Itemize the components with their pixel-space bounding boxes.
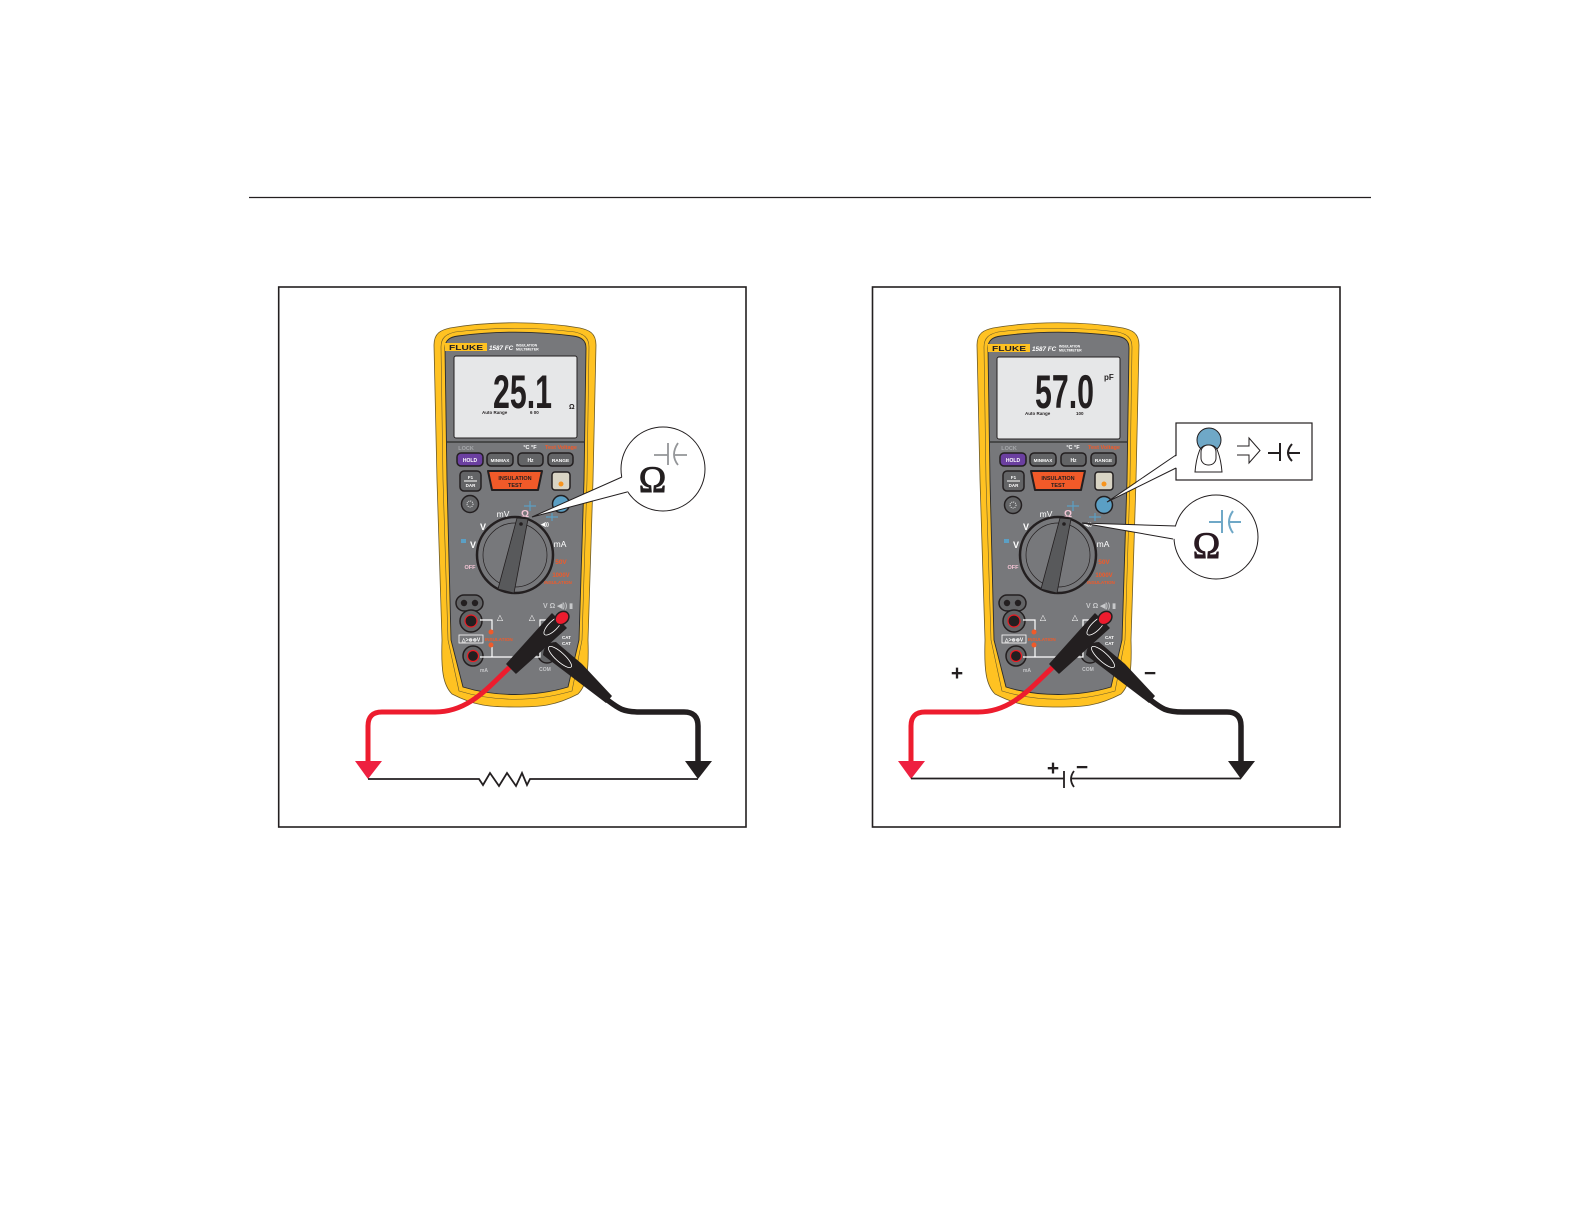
- display: Auto Range: [1025, 411, 1051, 416]
- jack markings: [459, 603, 573, 674]
- display: 25.1: [493, 365, 552, 418]
- button row 1: HOLD: [1006, 458, 1020, 464]
- function labels: LOCK: [1001, 446, 1017, 452]
- meter body: [977, 323, 1139, 707]
- dial labels: V: [1013, 540, 1019, 550]
- polarity labels: −: [1076, 756, 1088, 779]
- meter body: [434, 323, 596, 707]
- jack markings: △: [529, 613, 536, 622]
- display: [454, 356, 577, 438]
- button row 2: DAR: [1009, 483, 1019, 488]
- dial labels: mV: [1040, 509, 1053, 519]
- button row 2: TEST: [508, 483, 523, 489]
- function labels: LOCK: [458, 446, 474, 452]
- callout: dial position left: Ω: [639, 460, 666, 501]
- dial labels: INSULATION: [544, 580, 573, 585]
- meter faceplate: [445, 332, 586, 694]
- function labels: Test Voltage: [1088, 445, 1120, 451]
- dial labels: ◀)): [1083, 521, 1092, 528]
- dial labels: 1000V: [1095, 573, 1113, 579]
- display: Auto Range: [482, 410, 508, 415]
- button row 1: [457, 453, 573, 466]
- button row 1: RANGE: [552, 458, 570, 464]
- button row 1: RANGE: [1095, 458, 1113, 464]
- dial labels: mA: [1097, 539, 1110, 549]
- display: 6 00: [530, 410, 539, 415]
- dial labels: OFF: [1008, 565, 1019, 571]
- button row 1: MINMAX: [1034, 458, 1053, 463]
- panel: capacitance measurement: [872, 287, 1340, 827]
- rotary dial: [1020, 517, 1096, 593]
- button row 2: DAR: [466, 483, 476, 488]
- jack markings: INSULATION: [1028, 637, 1056, 642]
- function labels: °C °F: [1066, 445, 1080, 451]
- blue button: [1096, 496, 1112, 514]
- input jacks: [456, 595, 556, 666]
- black test lead left: [543, 642, 712, 779]
- brand strip: [445, 343, 539, 352]
- brand strip: INSULATION: [516, 344, 538, 348]
- jack markings: △>⊗⊗V: [461, 638, 481, 644]
- icon: outline arrow: [1237, 438, 1260, 463]
- button row 1: HOLD: [463, 458, 477, 464]
- dial labels: INSULATION: [1087, 580, 1116, 585]
- capacitor circuit: [911, 771, 1241, 788]
- dial labels: V: [470, 540, 476, 550]
- polarity labels: +: [951, 662, 963, 685]
- polarity labels: +: [1047, 757, 1059, 780]
- jack markings: CAT: [562, 641, 571, 646]
- dial labels: ◀)): [540, 521, 549, 528]
- function labels: [1001, 445, 1120, 452]
- display: 100: [1076, 411, 1084, 416]
- dial labels: 1000V: [552, 573, 570, 579]
- function labels: Test Voltage: [545, 445, 577, 451]
- panel frame right: [872, 287, 1340, 827]
- brand strip: 1587 FC: [489, 345, 514, 352]
- panel frame left: [279, 287, 746, 827]
- dial labels: 50V: [555, 559, 567, 566]
- callout: dial position right: [1082, 495, 1258, 579]
- jack markings: mA: [1023, 668, 1031, 674]
- button row 2: INSULATION: [498, 476, 532, 482]
- button row 2: F1: [1011, 475, 1017, 480]
- brand strip: 1587 FC: [1032, 346, 1057, 353]
- multimeter right: [977, 323, 1139, 707]
- button row 1: [1000, 453, 1116, 466]
- multimeter left: [434, 323, 596, 707]
- panel: resistance measurement: [279, 287, 746, 827]
- brand strip: FLUKE: [449, 343, 483, 352]
- red test lead left: [355, 609, 572, 779]
- button row 1: Hz: [527, 458, 534, 464]
- dial labels: V: [480, 522, 486, 532]
- button row 1: Hz: [1070, 458, 1077, 464]
- backlight button: [1004, 496, 1022, 514]
- icon: finger pressing button: [1195, 428, 1222, 472]
- jack markings: mA: [480, 668, 488, 674]
- dial labels: mA: [554, 539, 567, 549]
- rotary dial: [477, 517, 553, 593]
- button row 2: TEST: [1051, 483, 1066, 489]
- button row 2: INSULATION: [1041, 476, 1075, 482]
- top rule: [249, 196, 1371, 198]
- dial labels: Ω: [1064, 509, 1072, 520]
- display: 57.0: [1035, 365, 1094, 418]
- dial labels: mV: [497, 509, 510, 519]
- jack markings: △>⊗⊗V: [1004, 638, 1024, 644]
- jack markings: V Ω ◀)) ▮: [1086, 603, 1116, 610]
- jack markings: CAT: [1105, 635, 1114, 640]
- jack markings: △: [1040, 613, 1047, 622]
- backlight button: [462, 496, 478, 512]
- polarity labels: [951, 662, 1156, 780]
- jack markings: COM: [539, 667, 551, 673]
- dial labels: V: [1023, 522, 1029, 532]
- jack markings: △: [497, 613, 504, 622]
- brand strip: MULTIMETER: [1059, 348, 1082, 352]
- dial labels: Ω: [521, 509, 529, 520]
- brand strip: INSULATION: [1059, 344, 1081, 348]
- resistor circuit: [368, 773, 698, 786]
- meter faceplate: [988, 332, 1129, 694]
- brand strip: [988, 344, 1082, 353]
- brand strip: FLUKE: [992, 344, 1026, 353]
- callout: dial position left: [532, 427, 705, 517]
- display: [997, 357, 1120, 439]
- jack markings: [1002, 603, 1116, 674]
- callout: dial position right: Ω: [1193, 526, 1220, 567]
- black test lead right: [1086, 642, 1255, 779]
- jack markings: INSULATION: [485, 637, 513, 642]
- function labels: [458, 445, 577, 452]
- dial labels: 50V: [1098, 559, 1110, 566]
- brand strip: MULTIMETER: [516, 348, 539, 352]
- button row 1: MINMAX: [491, 458, 510, 463]
- jack markings: V Ω ◀)) ▮: [543, 603, 573, 610]
- blue button: [552, 496, 570, 512]
- display: pF: [1104, 373, 1114, 382]
- button row 2: [460, 471, 570, 491]
- jack markings: COM: [1082, 667, 1094, 673]
- polarity labels: −: [1144, 662, 1156, 685]
- input jacks: [999, 595, 1099, 666]
- jack markings: CAT: [562, 635, 571, 640]
- red test lead right: [898, 609, 1115, 779]
- dial labels: [461, 501, 573, 585]
- jack markings: CAT: [1105, 641, 1114, 646]
- button row 2: [1003, 471, 1113, 491]
- dial labels: OFF: [464, 565, 476, 571]
- button row 2: F1: [468, 475, 474, 480]
- display: Ω: [569, 404, 575, 411]
- dial labels: [1004, 501, 1116, 585]
- callout: capacitance button: [1107, 423, 1312, 502]
- function labels: °C °F: [523, 445, 537, 451]
- jack markings: △: [1072, 613, 1079, 622]
- icon: capacitor symbol: [1268, 443, 1300, 461]
